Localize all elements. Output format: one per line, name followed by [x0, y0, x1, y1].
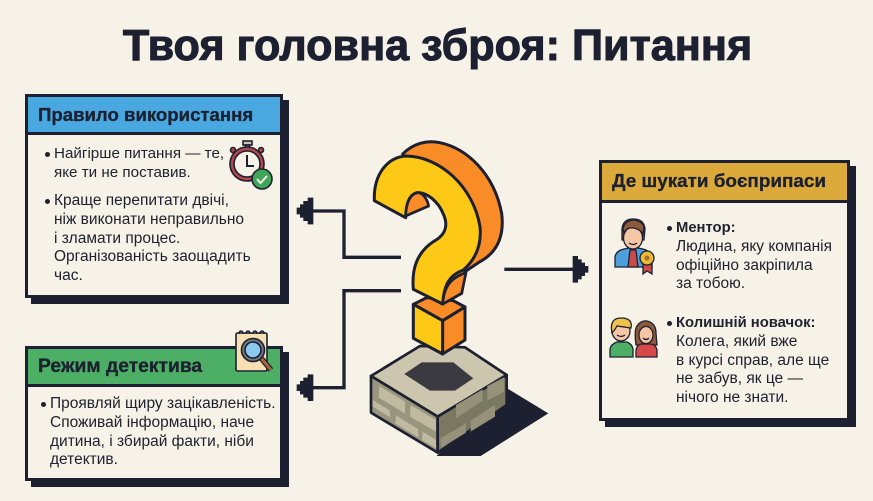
panel: detective mode [25, 346, 283, 481]
question mark inner hook [406, 193, 429, 216]
bullet text: ask twice: час. [54, 267, 83, 284]
panel: usage rule [25, 94, 283, 298]
icon: stopwatch with check [230, 141, 272, 189]
bullet text: former newcomer: нічого не знати. [676, 389, 788, 406]
question mark inner stem [443, 273, 466, 304]
bullet text: worst question: яке ти не поставив. [54, 164, 191, 181]
bullet text: worst question: Найгірше питання — те, [54, 145, 224, 162]
bullet text: worst question [45, 145, 224, 181]
bullet text: mentor: офіційно закріпила [676, 257, 813, 274]
icon: former newcomers [610, 318, 657, 357]
question mark back [403, 142, 502, 304]
bullet text: curiosity [41, 395, 276, 468]
bullet text: mentor: Ментор: [676, 220, 736, 236]
pedestal [371, 346, 507, 453]
bullet text: ask twice: Організованість заощадить [54, 248, 251, 265]
bullet text: curiosity: дитина, і збирай факти, ніби [50, 433, 254, 450]
bullet text: former newcomer: в курсі справ, але ще [676, 352, 829, 369]
bullet text: ask twice [45, 192, 251, 284]
heading: where to find ammo [602, 163, 847, 203]
bullet text: former newcomer [667, 315, 829, 406]
bullet text: ask twice: Краще перепитати двічі, [54, 192, 229, 209]
heading: usage rule: Правило використання [38, 104, 253, 125]
bullet text: former newcomer: Колега, який вже [676, 333, 797, 350]
bullet text: curiosity: детектив. [50, 451, 118, 468]
bullet text: mentor: за тобою. [676, 275, 745, 292]
arrow: to detective mode [297, 291, 401, 401]
question mark front [374, 156, 480, 304]
question mark dot [413, 298, 465, 354]
bullet text: ask twice: ніж виконати неправильно [54, 211, 244, 228]
illustration: question mark on pedestal [371, 142, 548, 456]
bullet text: former newcomer: не забув, як це — [676, 370, 803, 387]
heading: where to find ammo: Де шукати боєприпаси [612, 171, 826, 192]
bullet text: former newcomer: Колишній новачок: [676, 315, 816, 331]
heading: detective mode: Режим детектива [38, 356, 202, 377]
bullet text: curiosity: Проявляй щиру зацікавленість. [50, 395, 276, 412]
arrow: to ammo panel [504, 256, 588, 283]
bullet text: mentor: Людина, яку компанія [676, 238, 832, 255]
icon: notepad with magnifier [236, 331, 271, 371]
panel: where to find ammo [599, 160, 850, 421]
heading: detective mode [28, 349, 280, 387]
title: Твоя головна зброя: Питання [123, 22, 752, 70]
pedestal shadow [437, 386, 548, 456]
bullet text: ask twice: і зламати процес. [54, 230, 180, 247]
heading: usage rule [28, 97, 280, 135]
bullet text: curiosity: Споживай інформацію, наче [50, 414, 254, 431]
arrow: to usage rule [297, 198, 401, 257]
bullet text: mentor [667, 220, 832, 292]
icon: mentor [615, 219, 654, 274]
